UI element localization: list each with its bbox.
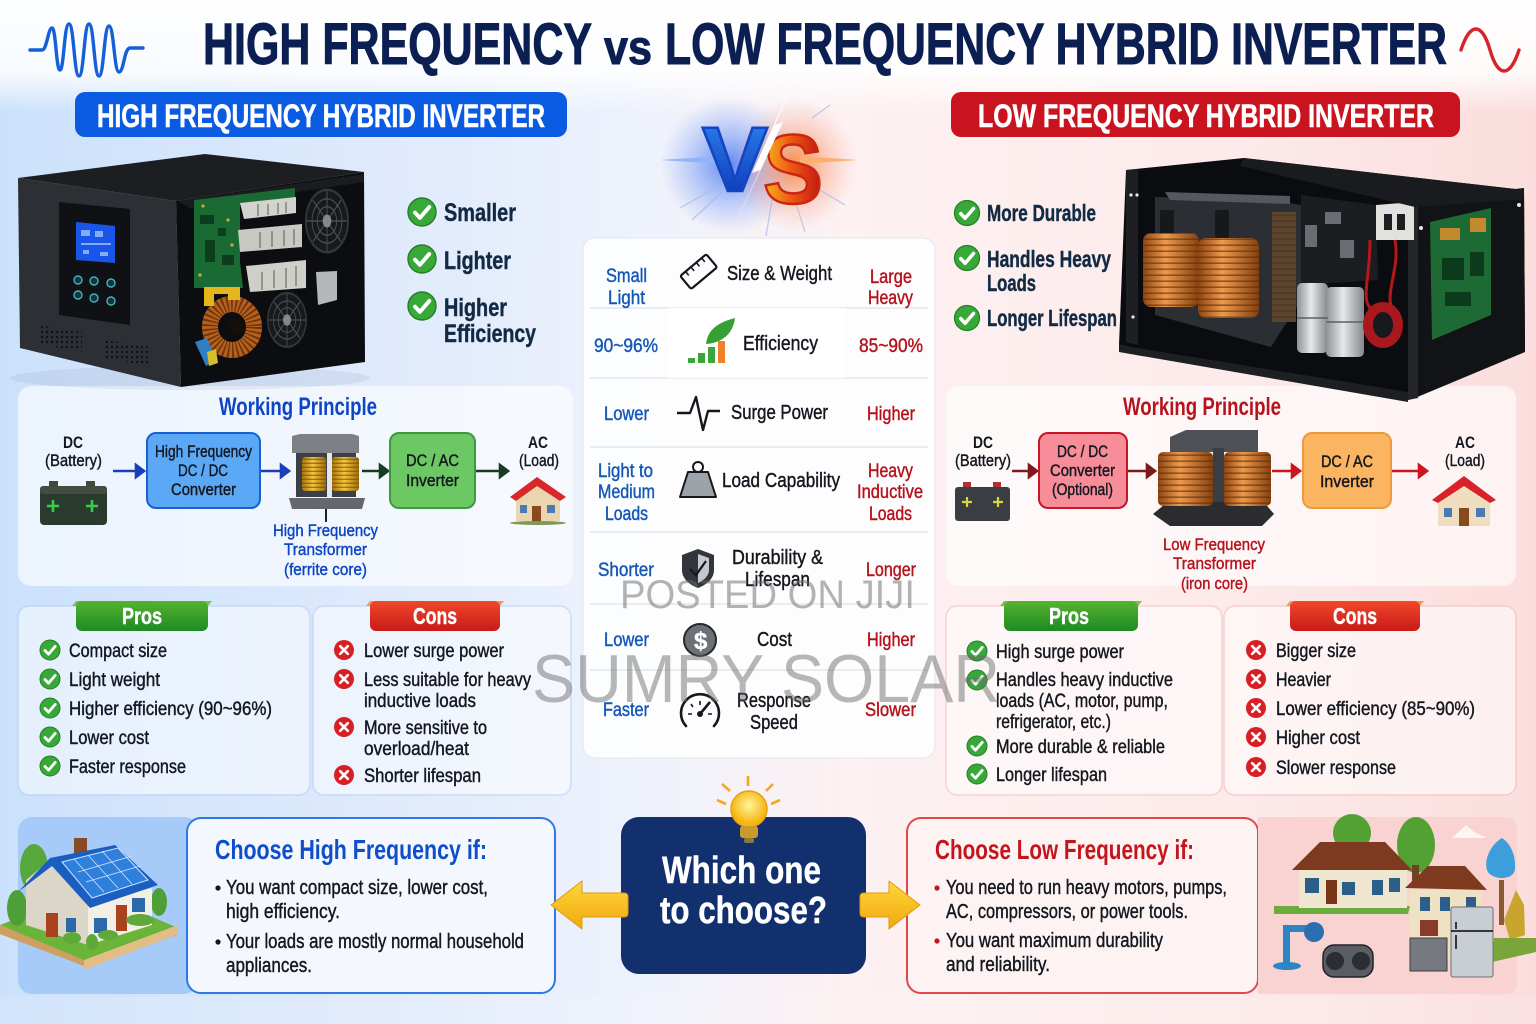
checklist: high frequency strengths: Lighter <box>444 247 511 275</box>
row: load capability <box>598 461 923 525</box>
row: durability and lifespan <box>598 547 917 591</box>
box: dc/dc converter: DC / DC <box>178 461 228 480</box>
row: size and weight: Light <box>608 288 646 309</box>
row: response speed: Response <box>737 690 811 712</box>
generator <box>1323 945 1373 977</box>
cons list: Lower efficiency (85~90%) <box>1276 699 1475 720</box>
pros list: Light weight <box>69 670 161 691</box>
row: surge power: Higher <box>867 404 916 425</box>
cons list: inductive loads <box>364 691 476 712</box>
transformer coils <box>1160 210 1229 240</box>
bullet points: and reliability. <box>946 954 1050 976</box>
panel: high frequency cons <box>313 601 571 795</box>
heading: Working Principle <box>1123 393 1281 421</box>
row: surge power: Surge Power <box>731 402 828 424</box>
pros list <box>40 640 272 778</box>
row: size and weight: Small <box>606 266 647 287</box>
row: response speed <box>603 690 917 734</box>
bullet points: AC, compressors, or power tools. <box>946 901 1188 923</box>
panel: low frequency cons <box>1224 601 1516 795</box>
cons ribbon: Cons <box>1333 603 1377 629</box>
cons list: Slower response <box>1276 758 1396 779</box>
row: efficiency: 90~96% <box>594 336 658 357</box>
row: cost <box>604 624 916 656</box>
arrow <box>261 465 289 477</box>
callout: which one to choose <box>621 817 866 974</box>
pros ribbon <box>72 601 212 631</box>
row: durability and lifespan: Durability & <box>732 547 824 569</box>
pros list: Lower cost <box>69 728 150 749</box>
arrow <box>1128 465 1155 477</box>
row: response speed: Faster <box>603 700 650 721</box>
checklist: low frequency strengths: Loads <box>987 270 1036 296</box>
box: dc/dc converter: Converter <box>171 480 236 499</box>
row: durability and lifespan: Longer <box>866 560 917 581</box>
illustration: low frequency inverter <box>1119 158 1525 402</box>
DC battery label: DC <box>973 433 993 452</box>
bullet points: appliances. <box>226 955 312 977</box>
DC battery label: (Battery) <box>45 451 102 470</box>
icon: VS burst <box>660 78 858 240</box>
icon: house <box>510 477 566 525</box>
checklist: low frequency strengths: Longer Lifespan <box>987 305 1117 331</box>
row: response speed: Slower <box>865 700 917 721</box>
capacitors <box>1297 283 1328 353</box>
box: optional converter: (Optional) <box>1052 480 1113 499</box>
icon: battery <box>40 481 107 525</box>
row: surge power: Lower <box>604 404 650 425</box>
AC load label <box>519 433 559 470</box>
arrow <box>113 465 144 477</box>
toroid coil <box>210 304 254 350</box>
heading: high frequency banner: HIGH FREQUENCY HYBRID INVERTER <box>97 98 545 134</box>
transformer caption: (ferrite core) <box>284 560 367 579</box>
cons list <box>334 640 531 787</box>
pros list: Longer lifespan <box>996 765 1107 786</box>
AC load label: AC <box>528 433 548 452</box>
arrow: right yellow <box>860 881 920 929</box>
bullet points: You need to run heavy motors, pumps, <box>946 877 1227 899</box>
panel: working principle high frequency <box>18 386 573 586</box>
row: load capability: Heavy <box>868 461 913 482</box>
illustration: high frequency inverter <box>10 154 370 390</box>
panel: working principle low frequency <box>946 386 1516 593</box>
AC load label <box>1445 433 1485 470</box>
S letter: S <box>763 114 823 224</box>
transformer caption: (iron core) <box>1181 574 1248 593</box>
box: dc/ac inverter: DC / AC <box>1321 452 1373 471</box>
DC battery label: DC <box>63 433 83 452</box>
row: cost: $ <box>694 628 708 655</box>
icon: low frequency sine wave <box>1461 29 1519 71</box>
box: optional converter: Converter <box>1050 461 1115 480</box>
panel: comparison table <box>583 238 935 758</box>
heading: Working Principle <box>219 393 377 421</box>
box: dc/dc converter: High Frequency <box>155 442 252 461</box>
water pump <box>1283 925 1310 965</box>
cons list: Bigger size <box>1276 641 1356 662</box>
row: load capability: Medium <box>598 482 655 503</box>
power unit <box>1410 938 1447 971</box>
arrow <box>362 465 388 477</box>
transformer caption: High Frequency <box>273 521 378 540</box>
heading: high frequency banner <box>75 92 567 137</box>
row: load capability: Load Capability <box>722 470 840 492</box>
panel: low frequency pros <box>946 601 1222 795</box>
row: load capability: Loads <box>605 504 648 525</box>
callout: which one to choose: to choose? <box>660 890 827 932</box>
title <box>203 12 1447 77</box>
heading: Choose Low Frequency if: <box>935 834 1194 865</box>
box: dc/ac inverter <box>390 433 475 508</box>
AC load label: AC <box>1455 433 1475 452</box>
transformer caption: Transformer <box>1173 554 1256 573</box>
pros ribbon: Pros <box>122 603 162 629</box>
icon: high frequency wave <box>30 24 143 76</box>
bullet points <box>934 877 1227 976</box>
checklist: high frequency strengths: Higher <box>444 294 507 322</box>
row: load capability: Loads <box>869 504 912 525</box>
arrow: left yellow <box>551 881 628 929</box>
transformer caption <box>1163 535 1265 593</box>
cons list: Less suitable for heavy <box>364 670 531 691</box>
watermark: posted on jiji: POSTED ON JIJI <box>620 573 915 617</box>
box: dc/ac inverter: DC / AC <box>406 451 459 470</box>
AC load label: (Load) <box>1445 451 1485 470</box>
box: optional converter <box>1039 433 1127 508</box>
icon: battery <box>955 482 1010 521</box>
box: dc/ac inverter <box>1303 433 1391 508</box>
bullet points: You want maximum durability <box>946 930 1163 952</box>
cons ribbon <box>366 601 504 631</box>
icon: house <box>1432 476 1496 526</box>
checklist: low frequency strengths: Handles Heavy <box>987 246 1111 272</box>
title: vs <box>604 22 652 75</box>
row: load capability: Light to <box>598 461 653 482</box>
row: cost: Higher <box>867 630 916 651</box>
icon: ferrite transformer <box>289 434 365 522</box>
DC battery label <box>955 433 1011 470</box>
transformer caption <box>273 521 378 579</box>
arrow <box>1272 465 1300 477</box>
bullet points: Your loads are mostly normal household <box>226 931 524 953</box>
pros list: Handles heavy inductive <box>996 670 1173 691</box>
checklist: high frequency strengths: Smaller <box>444 199 516 227</box>
row: cost: Lower <box>604 630 650 651</box>
panel: high frequency pros <box>18 601 310 795</box>
V letter: V <box>702 109 768 211</box>
red toroid <box>1368 307 1398 343</box>
panel: choose low frequency <box>907 818 1258 993</box>
callout: which one to choose: Which one <box>662 850 821 892</box>
arrow <box>1012 465 1037 477</box>
row: size and weight: Size & Weight <box>727 263 832 285</box>
row: efficiency: 85~90% <box>859 336 923 357</box>
bullet points <box>215 877 524 977</box>
cons list: Higher cost <box>1276 728 1361 749</box>
cons list: Shorter lifespan <box>364 766 481 787</box>
row: efficiency <box>594 318 923 363</box>
box: dc/dc converter <box>147 433 260 508</box>
row: cost: Cost <box>757 629 792 651</box>
DC battery label <box>45 433 102 470</box>
checklist: low frequency strengths <box>954 200 1117 331</box>
row: size and weight: Heavy <box>868 288 913 309</box>
control panel <box>59 202 130 325</box>
row: durability and lifespan: Lifespan <box>745 569 810 591</box>
pros ribbon: Pros <box>1049 603 1089 629</box>
pros list: Compact size <box>69 641 167 662</box>
cons ribbon: Cons <box>413 603 457 629</box>
cons list: Lower surge power <box>364 641 505 662</box>
icon: iron core transformer <box>1153 430 1274 526</box>
checklist: high frequency strengths <box>408 198 536 348</box>
pros list: Higher efficiency (90~96%) <box>69 699 272 720</box>
pros list: loads (AC, motor, pump, <box>996 691 1168 712</box>
arrow <box>1392 465 1427 477</box>
DC battery label: (Battery) <box>955 451 1011 470</box>
row: response speed: Speed <box>750 712 798 734</box>
AC load label: (Load) <box>519 451 559 470</box>
title: HIGH FREQUENCY <box>203 12 592 77</box>
cons list: overload/heat <box>364 739 470 760</box>
illustration: solar house <box>0 817 198 994</box>
cons list: Heavier <box>1276 670 1332 691</box>
arrow <box>476 465 508 477</box>
cons list <box>1246 640 1475 779</box>
pros list: More durable & reliable <box>996 737 1165 758</box>
heading: low frequency banner <box>951 92 1460 137</box>
checklist: high frequency strengths: Efficiency <box>444 320 536 348</box>
bullet points: high efficiency. <box>226 901 340 923</box>
row: size and weight: Large <box>870 267 912 288</box>
heading: Choose High Frequency if: <box>215 834 487 865</box>
box: dc/ac inverter: Inverter <box>406 471 459 490</box>
box: optional converter: DC / DC <box>1057 442 1108 461</box>
pros list: Faster response <box>69 757 186 778</box>
pros list: High surge power <box>996 642 1125 663</box>
refrigerator <box>1451 907 1493 977</box>
bullet points: You want compact size, lower cost, <box>226 877 488 899</box>
icon: light bulb <box>717 776 780 843</box>
row: durability and lifespan: Shorter <box>598 560 655 581</box>
box: dc/ac inverter: Inverter <box>1320 472 1374 491</box>
panel: choose high frequency <box>187 818 555 993</box>
row: size and weight <box>606 254 913 309</box>
pcb <box>194 188 295 288</box>
row: load capability: Inductive <box>857 482 923 503</box>
pros list: refrigerator, etc.) <box>996 712 1111 733</box>
row: surge power <box>604 397 916 430</box>
checklist: low frequency strengths: More Durable <box>987 200 1096 226</box>
pros list <box>967 641 1173 786</box>
cons ribbon <box>1286 601 1424 631</box>
row: efficiency: Efficiency <box>743 333 818 355</box>
transformer caption: Transformer <box>284 540 367 559</box>
illustration: house with heavy appliances <box>1258 814 1536 994</box>
transformer caption: Low Frequency <box>1163 535 1265 554</box>
cons list: More sensitive to <box>364 718 487 739</box>
pros ribbon <box>1000 601 1142 631</box>
watermark: sumry solar: SUMRY SOLAR <box>532 641 1000 717</box>
